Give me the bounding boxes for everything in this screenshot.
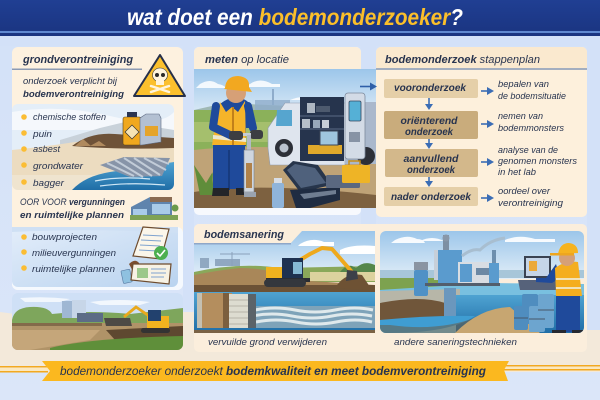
list: permit topics: milieuvergunningen	[32, 248, 116, 259]
text: ook voor vergunningen	[20, 197, 125, 221]
illustration: sample bottle	[272, 178, 284, 208]
illustration: technician with soil sampler	[212, 76, 263, 197]
text: step descriptions: in het lab	[498, 167, 537, 178]
panel: meten op locatie	[194, 47, 376, 215]
caption: vervuilde grond verwijderen: vervuilde grond verwijderen	[208, 337, 327, 348]
illustration: equipment cases	[283, 161, 370, 208]
step: aanvullend onderzoek: onderzoek	[407, 165, 455, 176]
text: step descriptions: bepalen van	[498, 79, 549, 90]
panel: permit topics	[12, 227, 178, 287]
icon: clipboard with check	[133, 227, 169, 260]
arrow: location to stappenplan	[360, 82, 377, 90]
illustration: chemical containers	[123, 112, 161, 145]
heading: stappenplan: bodemonderzoek stappenplan	[385, 54, 540, 66]
list: permit topics: ruimtelijke plannen	[32, 264, 115, 275]
step: vooronderzoek: vooronderzoek	[394, 83, 466, 94]
panel: bodemonderzoek stappenplan	[376, 47, 587, 217]
step: vooronderzoek	[384, 79, 478, 98]
step: oriënterend onderzoek	[384, 111, 478, 139]
image: remediation plant	[375, 231, 584, 334]
step: oriënterend onderzoek: oriënterend	[400, 116, 458, 127]
list: contaminants: grondwater	[33, 161, 84, 172]
list: contaminants: chemische stoffen	[33, 112, 106, 123]
illustration: white van	[268, 93, 376, 165]
list: permit topics: bouwprojecten	[32, 232, 97, 243]
text: step descriptions: bodemmonsters	[498, 123, 564, 134]
text: onderzoek verplicht: onderzoek verplicht bij	[23, 76, 118, 87]
list: contaminants: puin	[32, 129, 52, 140]
arrows: between steps	[425, 98, 433, 187]
text: onderzoek verplicht: bodemverontreiniging	[23, 89, 124, 100]
step: aanvullend onderzoek: aanvullend	[404, 154, 459, 165]
panel: grondverontreiniging	[12, 47, 185, 290]
title banner	[0, 0, 600, 36]
icon: office building	[130, 197, 178, 220]
banner: key message: bodemonderzoeker onderzoekt bodemkwaliteit en meet bodemverontreiniging	[60, 364, 487, 378]
illustration: corrugated sheet	[100, 157, 170, 177]
text: ook voor vergunningen: en ruimtelijke plannen	[20, 210, 124, 221]
title: wat doet een bodemonderzoeker?	[127, 4, 463, 30]
illustration: blue barrels	[514, 294, 554, 332]
panel: bodemsanering	[194, 224, 587, 352]
heading: grondverontreiniging: grondverontreiniging	[22, 54, 133, 66]
text: step descriptions: analyse van de	[498, 145, 558, 156]
text: step descriptions: nemen van	[498, 111, 543, 122]
list: contaminants: asbest	[33, 144, 60, 155]
illustration: small excavator	[104, 307, 170, 333]
illustration: treatment towers	[414, 234, 505, 296]
text: onderzoek verplicht	[23, 76, 124, 100]
icon: open plan and sample	[121, 261, 171, 284]
image: field measurement	[194, 69, 376, 208]
list: contaminants	[21, 112, 106, 189]
text: step descriptions: genomen monsters	[498, 156, 577, 167]
illustration: large excavator	[264, 248, 358, 287]
illustration: excavation wall section	[197, 293, 256, 328]
step: aanvullend onderzoek	[385, 149, 478, 177]
icon: warning triangle with skull	[134, 55, 185, 96]
caption: andere saneringstechnieken: andere saneringstechnieken	[394, 337, 517, 348]
step: nader onderzoek: nader onderzoek	[391, 192, 471, 203]
arrows: step to description	[481, 87, 494, 202]
text: step descriptions: verontreiniging	[498, 198, 564, 209]
text: step descriptions: oordeel over	[498, 186, 551, 197]
step: oriënterend onderzoek: onderzoek	[405, 127, 453, 138]
list: permit topics	[21, 232, 116, 275]
tab: heading bodemsanering	[194, 224, 380, 244]
text: step descriptions: de bodemsituatie	[498, 91, 566, 102]
list: contaminants: bagger	[33, 178, 65, 189]
text: step descriptions	[498, 79, 577, 209]
illustration: technician at console	[518, 243, 584, 334]
banner: key message	[0, 361, 600, 381]
image: excavation of polluted soil	[194, 231, 375, 333]
image: excavator on site	[12, 293, 183, 350]
tab: heading bodemsanering: bodemsanering	[204, 229, 284, 241]
heading: meten op locatie: meten op locatie	[205, 54, 289, 66]
step: nader onderzoek	[384, 187, 478, 206]
text: ook voor vergunningen: OOR VOOR vergunningen	[20, 197, 125, 208]
image: contaminated shore	[12, 104, 174, 190]
